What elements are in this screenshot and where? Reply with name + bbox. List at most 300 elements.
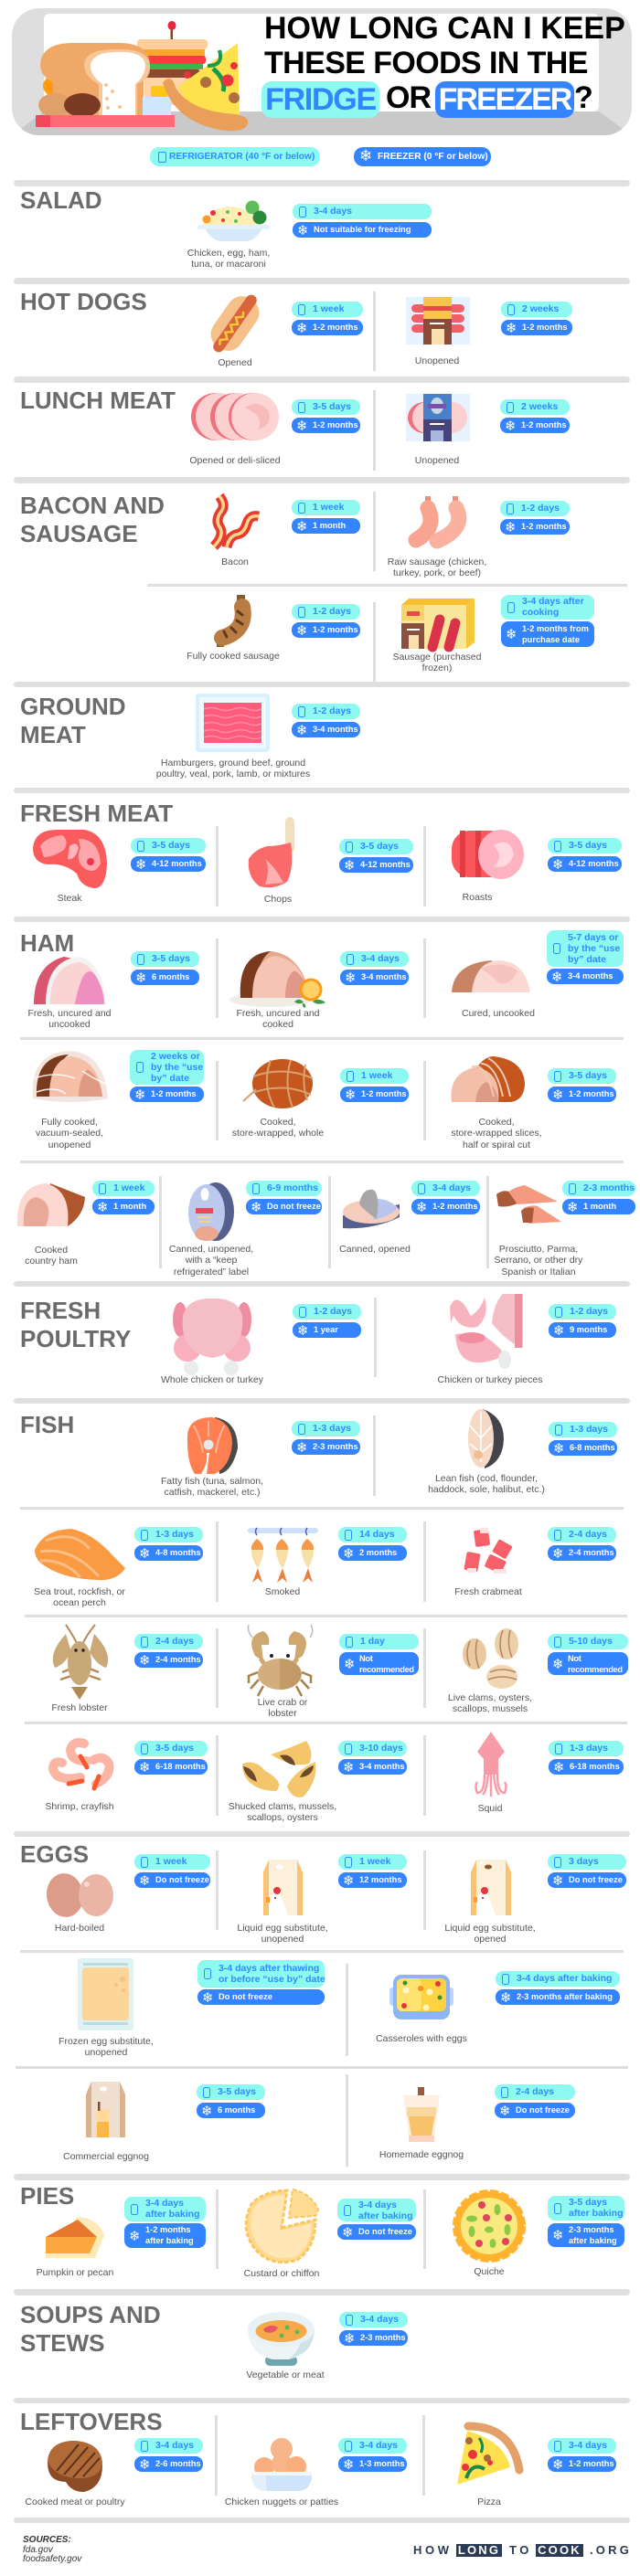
caption: live crab: lobster bbox=[268, 1708, 297, 1719]
storage times: fatty fish bbox=[292, 1421, 360, 1455]
panel: ground meat bbox=[20, 693, 360, 779]
heading: ham: HAM bbox=[20, 929, 74, 957]
storage times: egg substitute opened: 3 days bbox=[569, 1856, 599, 1867]
storage times: egg substitute opened: Do not freeze bbox=[569, 1875, 623, 1884]
storage times: vacuum-sealed: by” date bbox=[151, 1073, 189, 1084]
storage times: fresh uncured uncooked: 6 months bbox=[152, 972, 189, 981]
icon: netted whole ham bbox=[243, 1060, 314, 1108]
question mark: ? bbox=[574, 80, 593, 115]
storage times: prosciutto: ❄ bbox=[567, 1199, 579, 1215]
legend: freezer: ❄ bbox=[359, 147, 372, 165]
caption: egg substitute opened: Liquid egg substitute, bbox=[444, 1923, 536, 1934]
storage times: sea trout bbox=[134, 1527, 203, 1561]
caption: soup: Vegetable or meat bbox=[246, 2369, 325, 2380]
storage times: smoked: ❄ bbox=[343, 1544, 355, 1561]
panel: pies bbox=[0, 2180, 640, 2289]
storage times: live clams: recommended bbox=[568, 1665, 623, 1674]
storage times: vacuum-sealed: 2 weeks or bbox=[151, 1051, 200, 1062]
heading: lunch meat: LUNCH MEAT bbox=[20, 387, 176, 414]
storage times: fresh lobster: 2-4 months bbox=[155, 1655, 201, 1664]
storage times: chicken nuggets bbox=[338, 2438, 407, 2472]
icon: canned ham bbox=[188, 1182, 234, 1241]
storage times: cooked whole: 1-2 months bbox=[361, 1089, 407, 1098]
storage times: smoked bbox=[338, 1527, 407, 1561]
icon: chicken pieces bbox=[450, 1294, 523, 1370]
caption: cooked whole: Cooked, bbox=[260, 1117, 296, 1128]
storage times: bacon bbox=[292, 500, 360, 534]
storage times: frozen egg substitute: or before “use by” date bbox=[219, 1974, 325, 1985]
caption: frozen egg substitute: Frozen egg substitute, bbox=[59, 2036, 154, 2047]
illustration: shelf with foods bbox=[12, 8, 632, 135]
caption: crabmeat: Fresh crabmeat bbox=[454, 1586, 522, 1597]
storage times: country ham: 1 month bbox=[113, 1202, 146, 1211]
caption: cooked slices: half or spiral cut bbox=[463, 1140, 530, 1150]
caption: egg substitute unopened bbox=[237, 1923, 328, 1945]
storage times: cooked meat: 2-6 months bbox=[155, 2459, 201, 2468]
caption: raw sausage: turkey, pork, or beef) bbox=[393, 567, 481, 578]
storage times: lean fish: ❄ bbox=[553, 1440, 565, 1457]
storage times: hot dogs unopened: ❄ bbox=[506, 320, 517, 336]
storage times: canned opened: ❄ bbox=[416, 1199, 428, 1215]
caption: salad bbox=[187, 247, 270, 270]
heading: leftovers: LEFTOVERS bbox=[20, 2408, 163, 2435]
panel: bacon and sausage bbox=[20, 492, 627, 682]
legend: freezer bbox=[354, 147, 491, 166]
icon: fatty fish steak bbox=[187, 1417, 238, 1474]
storage times: casseroles: 2-3 months after baking bbox=[517, 1992, 613, 2001]
icon: live clams bbox=[463, 1628, 519, 1689]
caption: squid: Squid bbox=[478, 1802, 502, 1813]
caption: live clams: Live clams, oysters, bbox=[448, 1692, 532, 1703]
storage times: quiche: 2-3 months bbox=[569, 2225, 614, 2234]
caption: sea trout: Sea trout, rockfish, or bbox=[34, 1586, 125, 1597]
caption: fresh uncured uncooked: Fresh, uncured and bbox=[27, 1007, 112, 1018]
storage times: casseroles: ❄ bbox=[500, 1988, 512, 2005]
storage times: lunch meat unopened: 1-2 months bbox=[521, 420, 567, 429]
storage times: hard-boiled: ❄ bbox=[139, 1871, 151, 1888]
caption: steak: Steak bbox=[58, 892, 81, 903]
storage times: chicken pieces: ❄ bbox=[553, 1321, 565, 1338]
storage times: canned opened: 1-2 months bbox=[432, 1202, 478, 1211]
sources: foodsafety.gov bbox=[23, 2554, 81, 2564]
storage times: whole chicken: ❄ bbox=[297, 1321, 309, 1338]
storage times: cooked slices: ❄ bbox=[552, 1086, 564, 1102]
icon: whole chicken bbox=[173, 1299, 251, 1375]
storage times: pizza: 1-2 months bbox=[569, 2459, 614, 2468]
storage times: soup bbox=[339, 2312, 408, 2346]
storage times: vacuum-sealed: ❄ bbox=[134, 1086, 146, 1102]
logo: how long to cook: LONG bbox=[458, 2543, 500, 2557]
panel: lunch meat bbox=[20, 387, 570, 471]
storage times: roasts bbox=[548, 838, 622, 872]
heading: pies: PIES bbox=[20, 2182, 74, 2210]
storage times: live crab bbox=[339, 1634, 419, 1675]
storage times: country ham: 1 week bbox=[113, 1182, 144, 1193]
storage times: steak: 4-12 months bbox=[152, 859, 202, 868]
caption: sausage purchased frozen: Sausage (purchased bbox=[393, 651, 481, 662]
title line 1: HOW LONG CAN I KEEP bbox=[264, 11, 625, 46]
icon: ground meat tray bbox=[196, 694, 270, 752]
storage times: custard pie: ❄ bbox=[342, 2224, 354, 2241]
caption: whole chicken: Whole chicken or turkey bbox=[161, 1374, 263, 1385]
caption: cooked meat: Cooked meat or poultry bbox=[25, 2496, 125, 2507]
storage times: lunch meat unopened: 2 weeks bbox=[521, 401, 558, 412]
caption: vacuum-sealed: unopened bbox=[48, 1140, 91, 1150]
storage times: egg substitute opened: ❄ bbox=[552, 1871, 564, 1888]
storage times: egg substitute unopened: 1 week bbox=[359, 1856, 390, 1867]
storage times: crabmeat: 2-4 days bbox=[569, 1529, 607, 1540]
logo: how long to cook bbox=[413, 2544, 629, 2557]
storage times: hot dogs unopened: 1-2 months bbox=[522, 323, 568, 332]
caption: canned unopened: with a “keep bbox=[186, 1255, 237, 1266]
storage times: shucked clams: ❄ bbox=[343, 1758, 355, 1775]
storage times: quiche: 3-5 days bbox=[569, 2197, 607, 2208]
storage times: quiche: ❄ bbox=[552, 2227, 564, 2243]
storage times: pizza bbox=[548, 2438, 616, 2472]
caption: fresh uncured uncooked: uncooked bbox=[48, 1019, 91, 1030]
storage times: vacuum-sealed bbox=[130, 1050, 204, 1102]
storage times: frozen egg substitute: ❄ bbox=[202, 1988, 214, 2005]
caption: prosciutto bbox=[495, 1243, 582, 1278]
caption: lean fish: Lean fish (cod, flounder, bbox=[435, 1473, 538, 1484]
storage times: cured uncooked: 5-7 days or bbox=[568, 932, 618, 943]
caption: ground meat bbox=[156, 757, 310, 779]
storage times: country ham bbox=[92, 1181, 155, 1214]
icon: hard-boiled eggs bbox=[47, 1874, 113, 1917]
caption: quiche: Quiche bbox=[474, 2266, 505, 2277]
legend: refrigerator: REFRIGERATOR (40 °F or below) bbox=[169, 152, 315, 162]
caption: live clams: scallops, mussels bbox=[453, 1703, 528, 1714]
caption: homemade eggnog: Homemade eggnog bbox=[379, 2149, 464, 2160]
sources: fda.gov bbox=[23, 2544, 53, 2555]
icon: frozen egg substitute bbox=[78, 1958, 133, 2030]
icon: country ham bbox=[17, 1183, 85, 1226]
icon: custard pie bbox=[245, 2189, 319, 2263]
icon: cooked meat bbox=[48, 2441, 102, 2492]
storage times: raw sausage: 1-2 months bbox=[521, 522, 567, 531]
storage times: cooked whole: 1 week bbox=[361, 1070, 392, 1081]
storage times: hard-boiled: Do not freeze bbox=[155, 1875, 209, 1884]
heading: ground meat: GROUND bbox=[20, 693, 126, 720]
caption: cooked whole: store-wrapped, whole bbox=[232, 1128, 324, 1139]
storage times: salad: Not suitable for freezing bbox=[314, 225, 411, 234]
icon: cured uncooked ham bbox=[452, 960, 530, 992]
caption: hard-boiled: Hard-boiled bbox=[55, 1923, 104, 1934]
storage times: live clams bbox=[548, 1634, 628, 1675]
caption: frozen egg substitute: unopened bbox=[85, 2047, 127, 2058]
storage times: pizza: ❄ bbox=[552, 2456, 564, 2473]
icon: quiche bbox=[453, 2189, 526, 2263]
storage times: cooked whole: ❄ bbox=[345, 1086, 357, 1102]
caption: canned opened: Canned, opened bbox=[339, 1243, 411, 1254]
icon: sea trout fillet bbox=[35, 1529, 125, 1580]
panel: leftovers bbox=[0, 2403, 640, 2518]
panel: hot dogs bbox=[20, 288, 572, 371]
caption: sea trout bbox=[34, 1586, 125, 1609]
caption: salad: Chicken, egg, ham, bbox=[187, 247, 270, 258]
storage times: roasts: 3-5 days bbox=[569, 840, 607, 851]
storage times: squid: 1-3 days bbox=[570, 1743, 608, 1754]
caption: cured uncooked: Cured, uncooked bbox=[462, 1007, 535, 1018]
storage times: soup: ❄ bbox=[344, 2330, 356, 2347]
storage times: cooked meat: ❄ bbox=[139, 2456, 151, 2473]
caption: canned unopened: refrigerated” label bbox=[174, 1267, 249, 1277]
storage times: bacon: 1 week bbox=[313, 502, 344, 513]
heading: soups and stews: SOUPS AND bbox=[20, 2301, 161, 2328]
icon: lobster bbox=[52, 1625, 108, 1700]
storage times: pumpkin pie: ❄ bbox=[129, 2228, 141, 2244]
icon: roast bbox=[452, 830, 524, 879]
storage times: commercial eggnog: ❄ bbox=[201, 2102, 213, 2118]
storage times: fresh uncured cooked bbox=[340, 951, 409, 985]
storage times: shrimp bbox=[134, 1741, 208, 1775]
caption: fresh uncured uncooked bbox=[27, 1007, 112, 1031]
storage times: frozen egg substitute: Do not freeze bbox=[219, 1992, 272, 2001]
icon: chops bbox=[249, 817, 294, 888]
caption: raw sausage bbox=[388, 556, 486, 578]
storage times: fatty fish: 1-3 days bbox=[313, 1423, 351, 1434]
caption: salad: tuna, or macaroni bbox=[191, 259, 266, 270]
heading: fresh poultry: FRESH bbox=[20, 1297, 101, 1324]
icon: homemade eggnog bbox=[403, 2087, 440, 2142]
storage times: cooked slices bbox=[548, 1068, 616, 1102]
caption: shucked clams: Shucked clams, mussels, bbox=[229, 1800, 336, 1811]
storage times: lean fish: 1-3 days bbox=[570, 1424, 608, 1435]
caption: prosciutto: Prosciutto, Parma, bbox=[499, 1243, 578, 1254]
storage times: lunch meat opened bbox=[292, 399, 360, 433]
storage times: custard pie: after baking bbox=[358, 2210, 413, 2221]
icon: frozen sausage box bbox=[401, 599, 475, 652]
caption: frozen egg substitute bbox=[59, 2036, 154, 2059]
storage times: sausage purchased frozen: ❄ bbox=[506, 626, 517, 642]
icon: live crab bbox=[245, 1625, 315, 1698]
caption: sausage purchased frozen bbox=[393, 651, 481, 673]
caption: lunch meat unopened: Unopened bbox=[415, 455, 459, 466]
caption: shucked clams bbox=[229, 1800, 336, 1824]
storage times: raw sausage: 1-2 days bbox=[521, 503, 560, 514]
caption: sausage purchased frozen: frozen) bbox=[422, 663, 452, 673]
icon: vacuum-sealed ham bbox=[32, 1051, 108, 1103]
storage times: canned unopened: 6-9 months bbox=[267, 1182, 318, 1193]
caption: country ham: Cooked bbox=[35, 1245, 68, 1256]
storage times: country ham: ❄ bbox=[97, 1199, 109, 1215]
storage times: prosciutto: 2-3 months bbox=[583, 1182, 635, 1193]
storage times: sausage purchased frozen: purchase date bbox=[522, 635, 580, 644]
heading: ground meat: MEAT bbox=[20, 721, 86, 748]
storage times: prosciutto bbox=[562, 1181, 635, 1214]
icon: crabmeat bbox=[464, 1528, 513, 1574]
storage times: fresh lobster: ❄ bbox=[139, 1652, 151, 1669]
storage times: fresh uncured cooked: ❄ bbox=[345, 969, 357, 985]
icon: casserole bbox=[389, 1975, 453, 2019]
storage times: sea trout: 4-8 months bbox=[155, 1548, 201, 1557]
storage times: fully cooked sausage: 1-2 days bbox=[313, 606, 351, 617]
storage times: cured uncooked: 3-4 months bbox=[568, 971, 613, 981]
storage times: crabmeat: ❄ bbox=[552, 1544, 564, 1561]
caption: country ham bbox=[25, 1245, 78, 1267]
panel: salad bbox=[20, 186, 432, 270]
icon: fresh cooked ham with orange bbox=[229, 951, 326, 1007]
storage times: ground meat: 3-4 months bbox=[313, 725, 358, 734]
storage times: chicken nuggets: 3-4 days bbox=[359, 2440, 398, 2451]
storage times: squid: 6-18 months bbox=[570, 1762, 620, 1771]
caption: ground meat: poultry, veal, pork, lamb, or mixtures bbox=[156, 769, 310, 779]
icon: commercial eggnog bbox=[86, 2082, 125, 2137]
storage times: chops: ❄ bbox=[344, 857, 356, 874]
logo: how long to cook: TO bbox=[509, 2543, 532, 2557]
caption: pizza: Pizza bbox=[477, 2496, 501, 2507]
storage times: fresh lobster: 2-4 days bbox=[155, 1636, 194, 1647]
caption: cooked slices bbox=[451, 1117, 542, 1151]
storage times: hot dogs opened bbox=[292, 302, 363, 336]
storage times: fatty fish: 2-3 months bbox=[313, 1442, 358, 1451]
caption: pumpkin pie: Pumpkin or pecan bbox=[37, 2266, 113, 2277]
icon: pumpkin pie bbox=[46, 2217, 104, 2258]
icon: smoked fish bbox=[248, 1527, 318, 1583]
storage times: pumpkin pie: 3-4 days bbox=[145, 2198, 184, 2209]
legend bbox=[150, 147, 491, 166]
caption: casseroles: Casseroles with eggs bbox=[376, 2032, 467, 2043]
storage times: shucked clams bbox=[338, 1741, 407, 1775]
storage times: live crab: Not bbox=[359, 1654, 372, 1663]
caption: hot dogs opened: Opened bbox=[218, 356, 252, 367]
storage times: ground meat: 1-2 days bbox=[313, 705, 351, 716]
storage times: chicken pieces bbox=[549, 1304, 616, 1338]
caption: bacon: Bacon bbox=[221, 556, 249, 567]
storage times: homemade eggnog: 2-4 days bbox=[516, 2086, 554, 2097]
storage times: shrimp: 3-5 days bbox=[155, 1743, 194, 1754]
storage times: pumpkin pie bbox=[124, 2197, 206, 2248]
storage times: lunch meat opened: 1-2 months bbox=[313, 420, 358, 429]
storage times: ground meat bbox=[292, 704, 360, 738]
title line 2: THESE FOODS IN THE bbox=[264, 46, 588, 80]
storage times: canned unopened: Do not freeze bbox=[267, 1202, 321, 1211]
storage times: prosciutto: 1 month bbox=[583, 1202, 616, 1211]
storage times: lean fish: 6-8 months bbox=[570, 1443, 615, 1452]
caption: vacuum-sealed: Fully cooked, bbox=[41, 1117, 98, 1128]
storage times: sea trout: 1-3 days bbox=[155, 1529, 194, 1540]
storage times: cooked meat: 3-4 days bbox=[155, 2440, 194, 2451]
icon: canned opened ham bbox=[343, 1190, 400, 1228]
storage times: homemade eggnog: Do not freeze bbox=[516, 2105, 570, 2115]
storage times: egg substitute unopened bbox=[338, 1854, 407, 1888]
caption: commercial eggnog: Commercial eggnog bbox=[63, 2151, 149, 2162]
storage times: smoked: 14 days bbox=[359, 1529, 395, 1540]
storage times: live clams: Not bbox=[568, 1654, 581, 1663]
storage times: fresh uncured cooked: 3-4 days bbox=[361, 953, 400, 964]
caption: vacuum-sealed bbox=[36, 1117, 103, 1151]
storage times: lunch meat unopened bbox=[500, 399, 570, 433]
panel: soups and stews bbox=[0, 2295, 640, 2398]
caption: canned unopened: Canned, unopened, bbox=[169, 1243, 253, 1254]
storage times: pumpkin pie: after baking bbox=[145, 2236, 194, 2245]
storage times: egg substitute opened bbox=[548, 1854, 626, 1888]
storage times: canned unopened bbox=[246, 1181, 322, 1214]
icon: squid bbox=[475, 1732, 507, 1797]
icon: shrimp bbox=[46, 1739, 113, 1789]
storage times: hot dogs unopened: 2 weeks bbox=[522, 303, 559, 314]
icon: raw sausage bbox=[408, 496, 466, 548]
storage times: live clams: 5-10 days bbox=[569, 1636, 613, 1647]
icon: steak bbox=[33, 830, 107, 888]
storage times: custard pie: Do not freeze bbox=[358, 2227, 412, 2236]
storage times: sausage purchased frozen: 1-2 months from bbox=[522, 624, 589, 633]
caption: vacuum-sealed: vacuum-sealed, bbox=[36, 1128, 103, 1139]
storage times: canned unopened: ❄ bbox=[251, 1199, 262, 1215]
heading: ground meat bbox=[20, 693, 126, 748]
caption: fresh uncured cooked: Fresh, uncured and bbox=[236, 1007, 320, 1018]
storage times: lunch meat opened: ❄ bbox=[296, 417, 308, 433]
storage times: steak: 3-5 days bbox=[152, 840, 190, 851]
storage times: lunch meat unopened: ❄ bbox=[505, 417, 517, 433]
storage times: chops: 3-5 days bbox=[360, 841, 399, 852]
icon: hot dog package bbox=[406, 297, 470, 345]
storage times: roasts: 4-12 months bbox=[569, 859, 619, 868]
panel: fish bbox=[0, 1404, 640, 1831]
storage times: chicken nuggets: ❄ bbox=[343, 2456, 355, 2473]
storage times: fully cooked sausage: 1-2 months bbox=[313, 625, 358, 634]
icon: hot dog bbox=[210, 294, 260, 353]
storage times: custard pie bbox=[337, 2199, 416, 2240]
storage times: cooked slices: 1-2 months bbox=[569, 1089, 614, 1098]
caption: sea trout: ocean perch bbox=[53, 1597, 106, 1608]
storage times: live crab: 1 day bbox=[360, 1636, 385, 1647]
storage times: egg substitute unopened: ❄ bbox=[343, 1871, 355, 1888]
caption: fatty fish bbox=[161, 1475, 263, 1499]
storage times: bacon: ❄ bbox=[296, 517, 308, 534]
icon: lunch meat package bbox=[406, 394, 470, 441]
storage times: pizza: 3-4 days bbox=[569, 2440, 607, 2451]
storage times: frozen egg substitute: 3-4 days after thawing bbox=[219, 1963, 319, 1974]
icon: soup bowl bbox=[248, 2312, 315, 2366]
caption: custard pie: Custard or chiffon bbox=[244, 2268, 319, 2279]
storage times: pumpkin pie: 1-2 months bbox=[145, 2225, 191, 2234]
caption: ground meat: Hamburgers, ground beef, ground bbox=[161, 757, 305, 768]
storage times: chops: 4-12 months bbox=[360, 860, 411, 869]
header banner bbox=[12, 8, 632, 135]
heading: fish: FISH bbox=[20, 1411, 74, 1438]
caption: egg substitute unopened: unopened bbox=[261, 1934, 304, 1945]
storage times: shucked clams: 3-10 days bbox=[359, 1743, 403, 1754]
caption: prosciutto: Serrano, or other dry bbox=[495, 1255, 582, 1266]
word: or: OR bbox=[386, 80, 431, 115]
caption: prosciutto: Spanish or Italian bbox=[501, 1267, 576, 1277]
storage times: steak: ❄ bbox=[135, 855, 147, 872]
caption: cooked slices: store-wrapped slices, bbox=[451, 1128, 542, 1139]
caption: egg substitute opened bbox=[444, 1923, 536, 1945]
storage times: hot dogs opened: 1 week bbox=[313, 303, 344, 314]
sources: SOURCES: bbox=[23, 2535, 71, 2545]
storage times: sausage purchased frozen: cooking bbox=[522, 607, 559, 618]
caption: country ham: country ham bbox=[25, 1256, 78, 1267]
icon: shucked clams bbox=[242, 1741, 317, 1799]
heading: soups and stews: STEWS bbox=[20, 2329, 104, 2357]
storage times: canned opened: 3-4 days bbox=[432, 1182, 471, 1193]
caption: live crab bbox=[258, 1696, 307, 1720]
caption: egg substitute opened: opened bbox=[474, 1934, 507, 1945]
caption: cooked whole bbox=[232, 1117, 324, 1140]
storage times: quiche bbox=[548, 2196, 624, 2247]
storage times: casseroles bbox=[496, 1971, 620, 2005]
storage times: whole chicken bbox=[293, 1304, 361, 1338]
storage times: salad: ❄ bbox=[297, 221, 309, 238]
storage times: quiche: after baking bbox=[569, 2236, 617, 2245]
storage times: soup: 2-3 months bbox=[360, 2333, 406, 2342]
highlighted word: fridge: FRIDGE bbox=[265, 82, 376, 117]
caption: lean fish: haddock, sole, halibut, etc.) bbox=[428, 1484, 545, 1495]
storage times: live crab: recommended bbox=[359, 1665, 414, 1674]
storage times: chicken pieces: 9 months bbox=[570, 1325, 607, 1334]
